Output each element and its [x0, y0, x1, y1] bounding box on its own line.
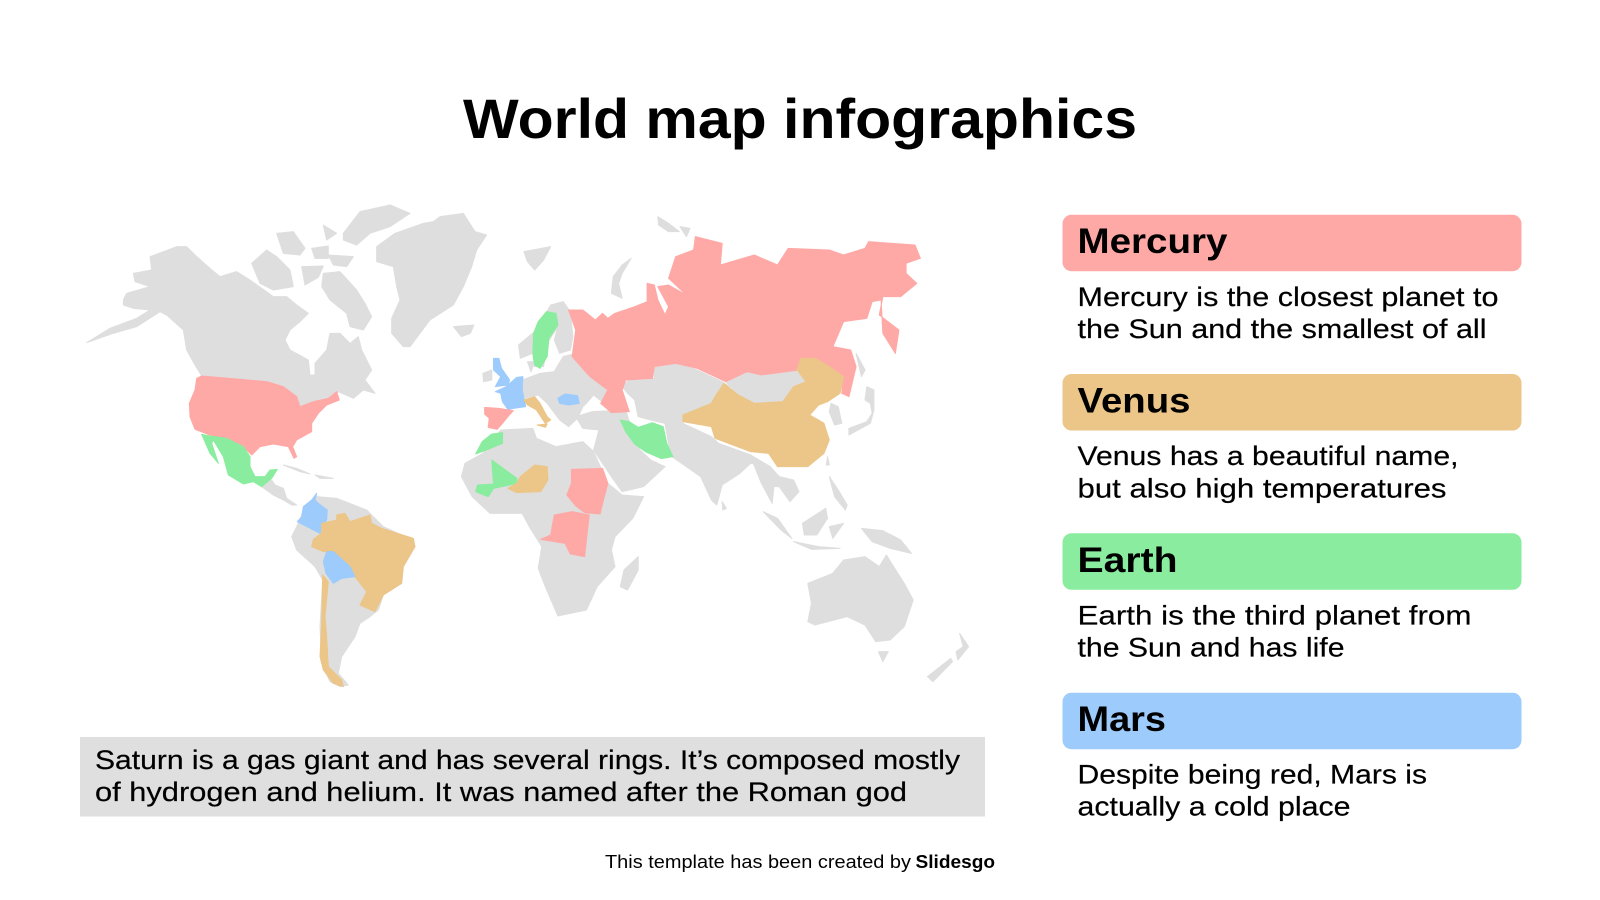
country: Colombia — [297, 493, 327, 533]
landmass: Australia and New Zealand — [808, 555, 969, 682]
Mars description: Despite being red, Mars is — [1078, 760, 1427, 790]
Venus description: but also high temperatures — [1078, 474, 1446, 504]
Mars description — [1078, 760, 1427, 821]
landmass: Alaska and Canada — [87, 247, 375, 407]
country: France — [495, 377, 526, 409]
country: Morocco — [476, 433, 502, 454]
country: Romania — [558, 394, 579, 405]
landmass: Greenland — [377, 213, 487, 347]
Saturn background — [80, 737, 985, 816]
country: Sudan — [567, 468, 608, 514]
Mars heading bar — [1062, 693, 1522, 749]
Saturn description — [95, 745, 961, 807]
footer credit: This template has been created by — [605, 852, 911, 872]
footer credit: Slidesgo — [916, 852, 995, 872]
Earth description: the Sun and has life — [1078, 632, 1344, 662]
landmass: East Asia islands — [826, 353, 874, 465]
map: Americas and Greenland — [87, 205, 487, 687]
country: Chile — [320, 575, 343, 687]
Earth description: Earth is the third planet from — [1078, 600, 1472, 630]
Venus description: Venus has a beautiful name, — [1078, 441, 1458, 471]
panel: Mercury — [1062, 215, 1522, 344]
country: Brazil — [312, 513, 415, 612]
panel: Mars — [1062, 693, 1522, 821]
Mercury heading bar — [1062, 215, 1522, 271]
country: Sweden — [533, 312, 558, 368]
country: Niger — [508, 465, 548, 493]
country: Italy — [524, 397, 551, 427]
landmass: Scandinavia — [519, 302, 573, 372]
Mars heading: Mars — [1078, 700, 1166, 739]
Earth heading bar — [1062, 533, 1522, 590]
panel: Earth — [1062, 533, 1522, 662]
country: Iran — [620, 420, 673, 459]
landmass: Central America and Caribbean — [262, 465, 333, 505]
Mars description: actually a cold place — [1078, 791, 1350, 821]
country: Spain — [485, 407, 513, 429]
Venus description — [1078, 441, 1458, 504]
Mercury description: Mercury is the closest planet to — [1078, 282, 1498, 312]
Venus heading bar — [1062, 374, 1522, 430]
landmass: Arctic and North Atlantic islands — [454, 217, 690, 382]
landmass: Mongolia — [726, 370, 806, 403]
landmass: continental Europe — [522, 353, 615, 427]
country: Mexico — [202, 434, 277, 487]
Mercury description — [1078, 282, 1498, 344]
landmass: Arctic islands — [252, 205, 410, 330]
Mercury description: the Sun and the smallest of all — [1078, 314, 1486, 344]
country: Russia — [569, 237, 920, 413]
landmass: South America — [292, 497, 415, 687]
Earth heading: Earth — [1078, 541, 1178, 580]
country: Mali — [476, 460, 517, 497]
panel: Venus — [1062, 374, 1522, 504]
map: Europe, Africa, Asia and Oceania — [454, 217, 969, 682]
country: DR Congo — [541, 512, 589, 557]
landmass: Central and South Asia — [622, 363, 770, 505]
Earth description — [1078, 600, 1472, 662]
world map — [87, 205, 969, 687]
Saturn description: Saturn is a gas giant and has several rings. It’s composed mostly — [95, 745, 961, 775]
landmass: Africa and Madagascar — [461, 428, 644, 616]
landmass: Middle East — [576, 410, 665, 492]
panel: Saturn text block — [80, 737, 985, 816]
Venus heading: Venus — [1078, 381, 1190, 420]
Saturn description: of hydrogen and helium. It was named after the Roman god — [95, 777, 907, 807]
country: United States — [189, 376, 339, 458]
title: World map infographics — [463, 87, 1137, 150]
country: United Kingdom — [494, 358, 510, 387]
Mercury heading: Mercury — [1078, 222, 1228, 261]
country: China — [683, 358, 844, 467]
country: Bolivia — [323, 552, 355, 583]
landmass: Southeast Asia — [722, 457, 911, 553]
